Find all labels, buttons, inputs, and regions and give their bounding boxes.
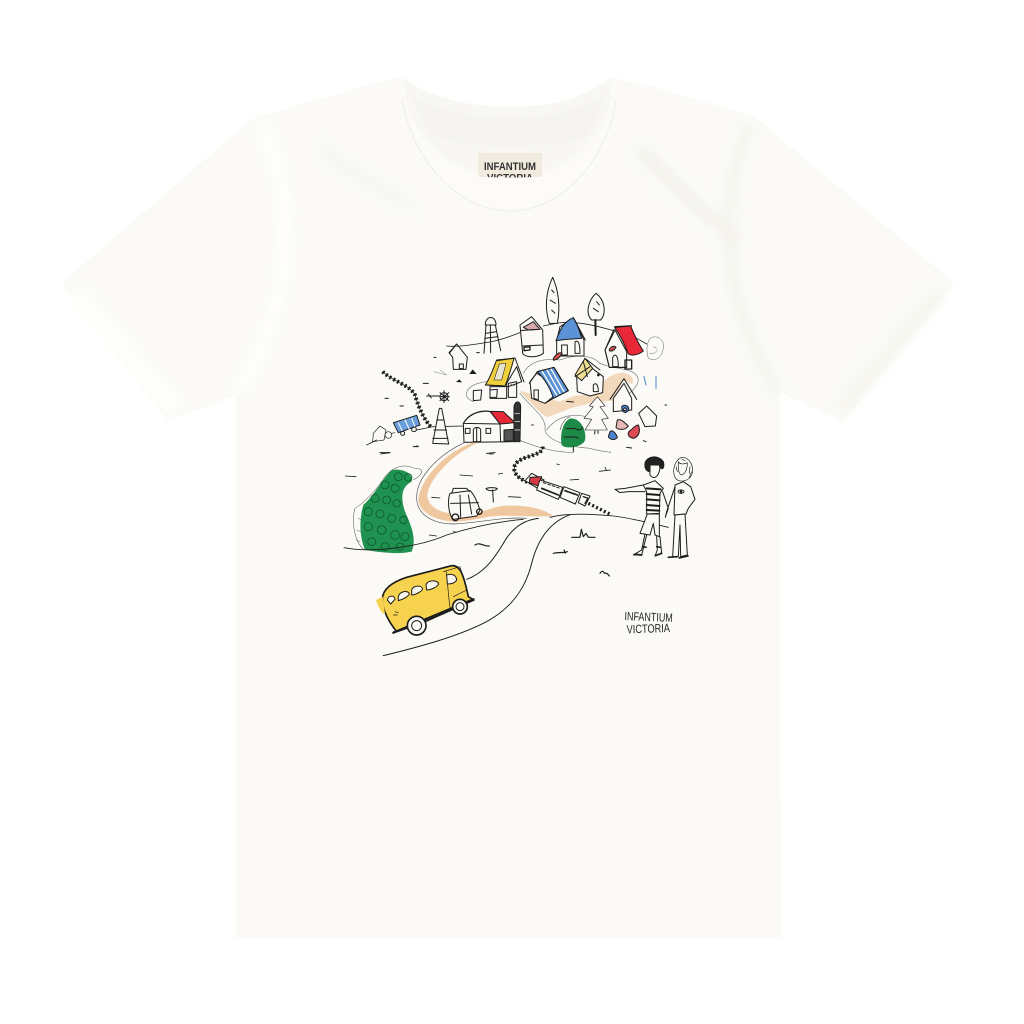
peach paths bbox=[519, 373, 633, 417]
bus bbox=[376, 566, 474, 635]
water tower bbox=[484, 317, 501, 353]
blue wagon bbox=[393, 415, 420, 435]
back collar bbox=[405, 78, 611, 178]
brand wordmark bbox=[624, 609, 673, 636]
house: red roof bbox=[605, 326, 643, 369]
brand wordmark: VICTORIA bbox=[626, 621, 670, 636]
girl bbox=[665, 457, 695, 558]
house: yellow cream bbox=[575, 358, 603, 396]
collar seam bbox=[402, 100, 616, 211]
neck label bbox=[478, 153, 542, 178]
boy bbox=[615, 457, 668, 556]
boy arm pointing bbox=[615, 485, 645, 493]
signpost bbox=[486, 488, 497, 502]
illustration: village bbox=[367, 277, 667, 453]
dark marks bbox=[380, 353, 667, 453]
illustration: lower scene bbox=[344, 442, 695, 656]
railway top left bbox=[383, 372, 431, 427]
hill lines bbox=[447, 322, 647, 346]
tuk-tuk bbox=[449, 488, 482, 521]
girl shirt bbox=[674, 482, 695, 515]
t-shirt bbox=[63, 76, 953, 938]
house: blue striped bbox=[529, 367, 568, 403]
neck label: INFANTIUM bbox=[484, 161, 536, 173]
house: blue roof bbox=[553, 318, 585, 360]
green tree bbox=[560, 417, 585, 452]
barn bbox=[463, 411, 515, 442]
boy shorts and legs bbox=[640, 514, 659, 537]
ground marks bbox=[345, 446, 611, 576]
neck label: VICTORIA bbox=[487, 173, 533, 184]
house: grey round bbox=[520, 317, 543, 357]
house: outline right bbox=[610, 379, 637, 412]
tree tall bbox=[546, 277, 559, 323]
main road bbox=[383, 515, 570, 656]
fir tree bbox=[584, 397, 608, 434]
ground lines bbox=[344, 514, 668, 550]
shirt body bbox=[63, 76, 953, 938]
back rib shade bbox=[414, 96, 602, 146]
small people bbox=[644, 377, 656, 388]
tree round bbox=[588, 293, 604, 335]
colored blobs bbox=[608, 420, 639, 440]
peach road bbox=[418, 443, 553, 522]
green hedge bbox=[353, 466, 422, 553]
small cottage bbox=[639, 406, 657, 427]
sleeve seams and folds bbox=[75, 125, 940, 410]
brand wordmark: INFANTIUM bbox=[624, 609, 673, 625]
tractor bbox=[373, 426, 395, 442]
train bbox=[525, 473, 590, 506]
boy shirt bbox=[643, 481, 663, 514]
boy head bbox=[649, 463, 660, 477]
front collar bbox=[404, 80, 614, 210]
windmill bbox=[427, 391, 449, 444]
girl hair and face bbox=[674, 457, 693, 481]
house: yellow roof bbox=[473, 358, 524, 401]
girl trousers bbox=[673, 514, 687, 557]
silo bbox=[514, 402, 521, 442]
small house left bbox=[449, 344, 467, 369]
shrub outline bbox=[647, 337, 664, 360]
railway bbox=[514, 447, 612, 515]
